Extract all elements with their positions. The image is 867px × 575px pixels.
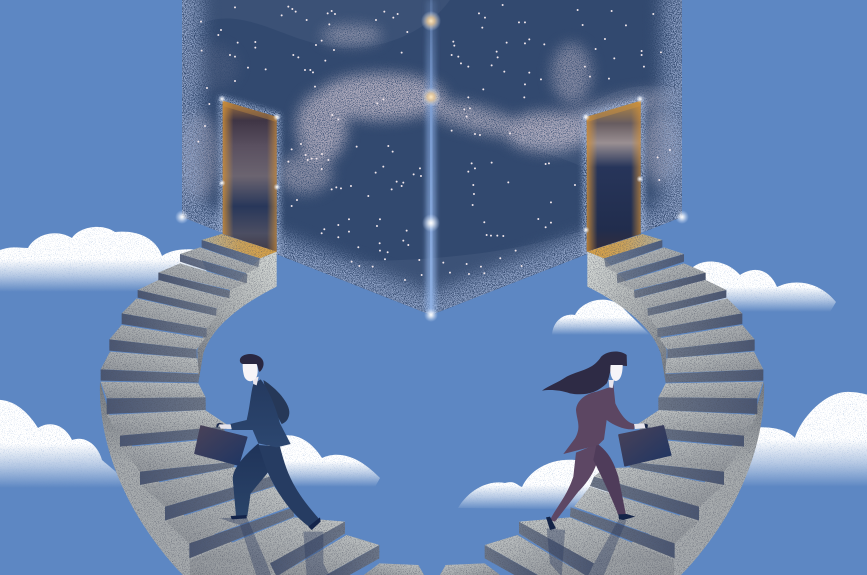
glowing star nodes [175,11,689,322]
man neck [253,377,259,385]
cloud: behind woman [458,460,620,510]
woman shadows [547,520,627,575]
woman jacket [563,384,635,454]
cloud: behind man [250,435,380,487]
centre spine [426,0,436,320]
door halos [223,101,641,252]
door: right [587,101,641,252]
clouds [0,227,867,510]
upper stringer [197,252,277,383]
man backpack [263,380,289,424]
staircase: right [439,234,764,575]
woman legs [546,443,635,530]
man jacket [230,379,291,447]
outer stringer [100,382,323,575]
woman neck [609,380,614,388]
steps [202,234,277,258]
dissolving panel edges [182,0,682,315]
door: left [223,101,277,252]
cloud: middle right [552,300,650,335]
man shadows [220,517,330,575]
cloud: upper left [0,227,215,292]
man face [243,363,258,381]
translucent wave bands [182,0,683,317]
man legs [231,443,321,530]
woman face [610,365,623,381]
man hair [240,354,264,372]
cloud: lower left [0,400,135,488]
nebula clouds [177,25,683,200]
stars [198,5,670,280]
staircase: left [100,234,425,575]
panel: starry sky [170,0,700,325]
cloud: lower right [720,392,867,487]
man briefcase [195,424,247,465]
figure: man with briefcase [195,354,330,575]
cloud: upper right [670,262,836,312]
figure: woman with briefcase [542,352,671,575]
woman hair [542,352,627,394]
woman briefcase [619,423,671,466]
